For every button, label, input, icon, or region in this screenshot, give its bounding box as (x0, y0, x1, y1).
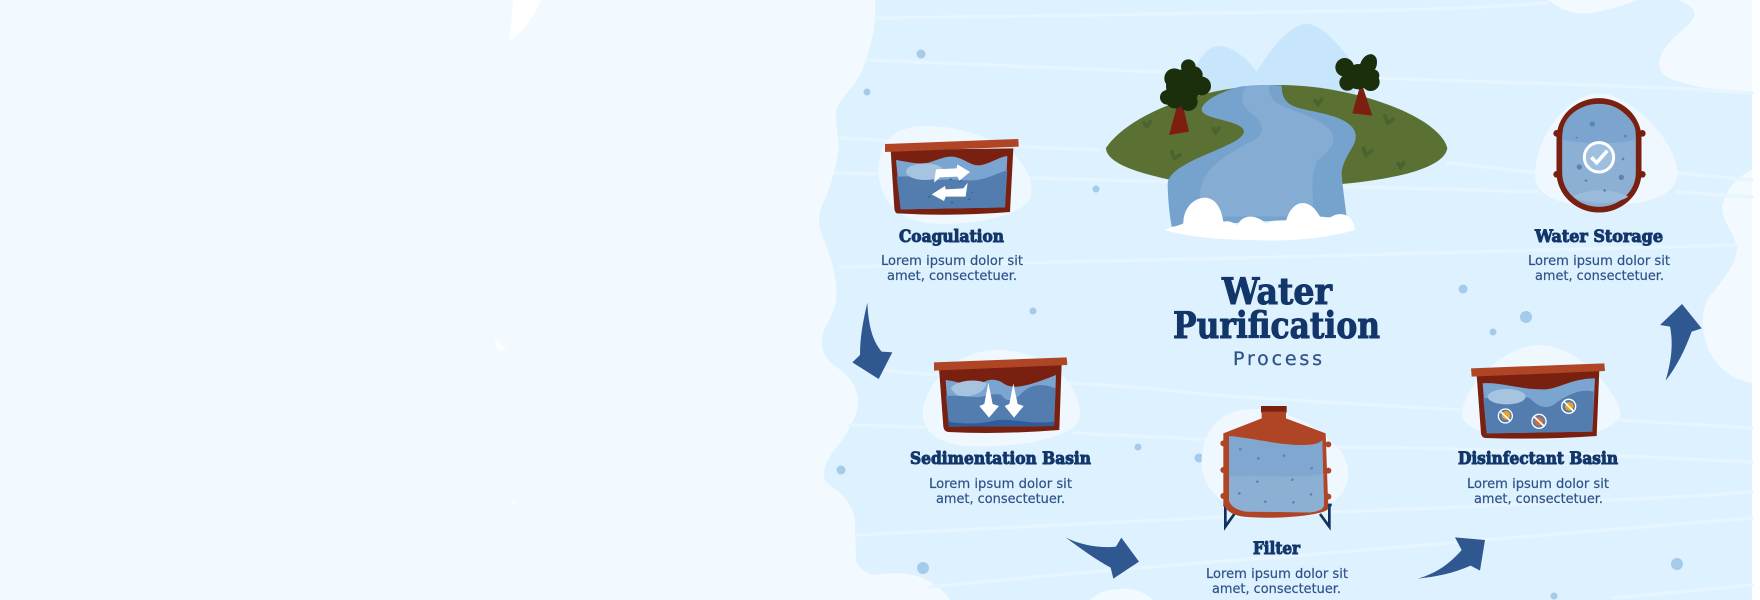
icon: disinfectant basin (1462, 345, 1621, 440)
arrow: sedimentation to filter (1066, 537, 1139, 579)
text block: Sedimentation description: amet, consectetuer. (936, 491, 1065, 507)
text block: Water Storage description: Lorem ipsum dolor sit (1528, 253, 1670, 269)
arrow: disinfectant to storage (1660, 304, 1702, 381)
heading: Filter: Filter (1253, 539, 1301, 559)
text block: Sedimentation description: Lorem ipsum dolor sit (929, 476, 1072, 492)
text block: Filter description (1206, 566, 1348, 597)
illustration: river landscape (1106, 24, 1447, 241)
text block: Coagulation description: Lorem ipsum dolor sit (881, 253, 1023, 269)
heading: Disinfectant Basin: Disinfectant Basin (1458, 449, 1618, 469)
title: Purification (1173, 305, 1380, 347)
text block: Disinfectant description (1467, 476, 1609, 507)
arrow: filter to disinfectant (1418, 537, 1485, 579)
text block: Disinfectant description: amet, consectetuer. (1474, 491, 1603, 507)
icon: sedimentation basin (923, 350, 1080, 447)
text block: Water Storage description: amet, consectetuer. (1535, 268, 1664, 284)
text block: Sedimentation description (929, 476, 1072, 507)
icon: filter tank (1202, 406, 1348, 527)
text block: Coagulation description: amet, consectetuer. (887, 268, 1017, 284)
text block: Filter description: Lorem ipsum dolor sit (1206, 566, 1348, 582)
text block: Filter description: amet, consectetuer. (1212, 581, 1341, 597)
title: Water (1221, 271, 1333, 313)
subtitle: Process (1233, 348, 1322, 370)
icon: water storage porthole (1535, 93, 1677, 210)
heading: Water Storage: Water Storage (1534, 227, 1663, 247)
heading: Coagulation: Coagulation (899, 227, 1004, 247)
decorative dots (836, 50, 1683, 600)
text block: Water Storage description (1528, 253, 1670, 284)
icon: coagulation tank (878, 126, 1031, 224)
title (1173, 271, 1380, 347)
arrow: coagulation to sedimentation (852, 303, 892, 379)
wave lines (836, 3, 1752, 598)
heading: Sedimentation Basin: Sedimentation Basin (910, 449, 1091, 469)
text block: Disinfectant description: Lorem ipsum dolor sit (1467, 476, 1609, 492)
text block: Coagulation description (881, 253, 1023, 284)
